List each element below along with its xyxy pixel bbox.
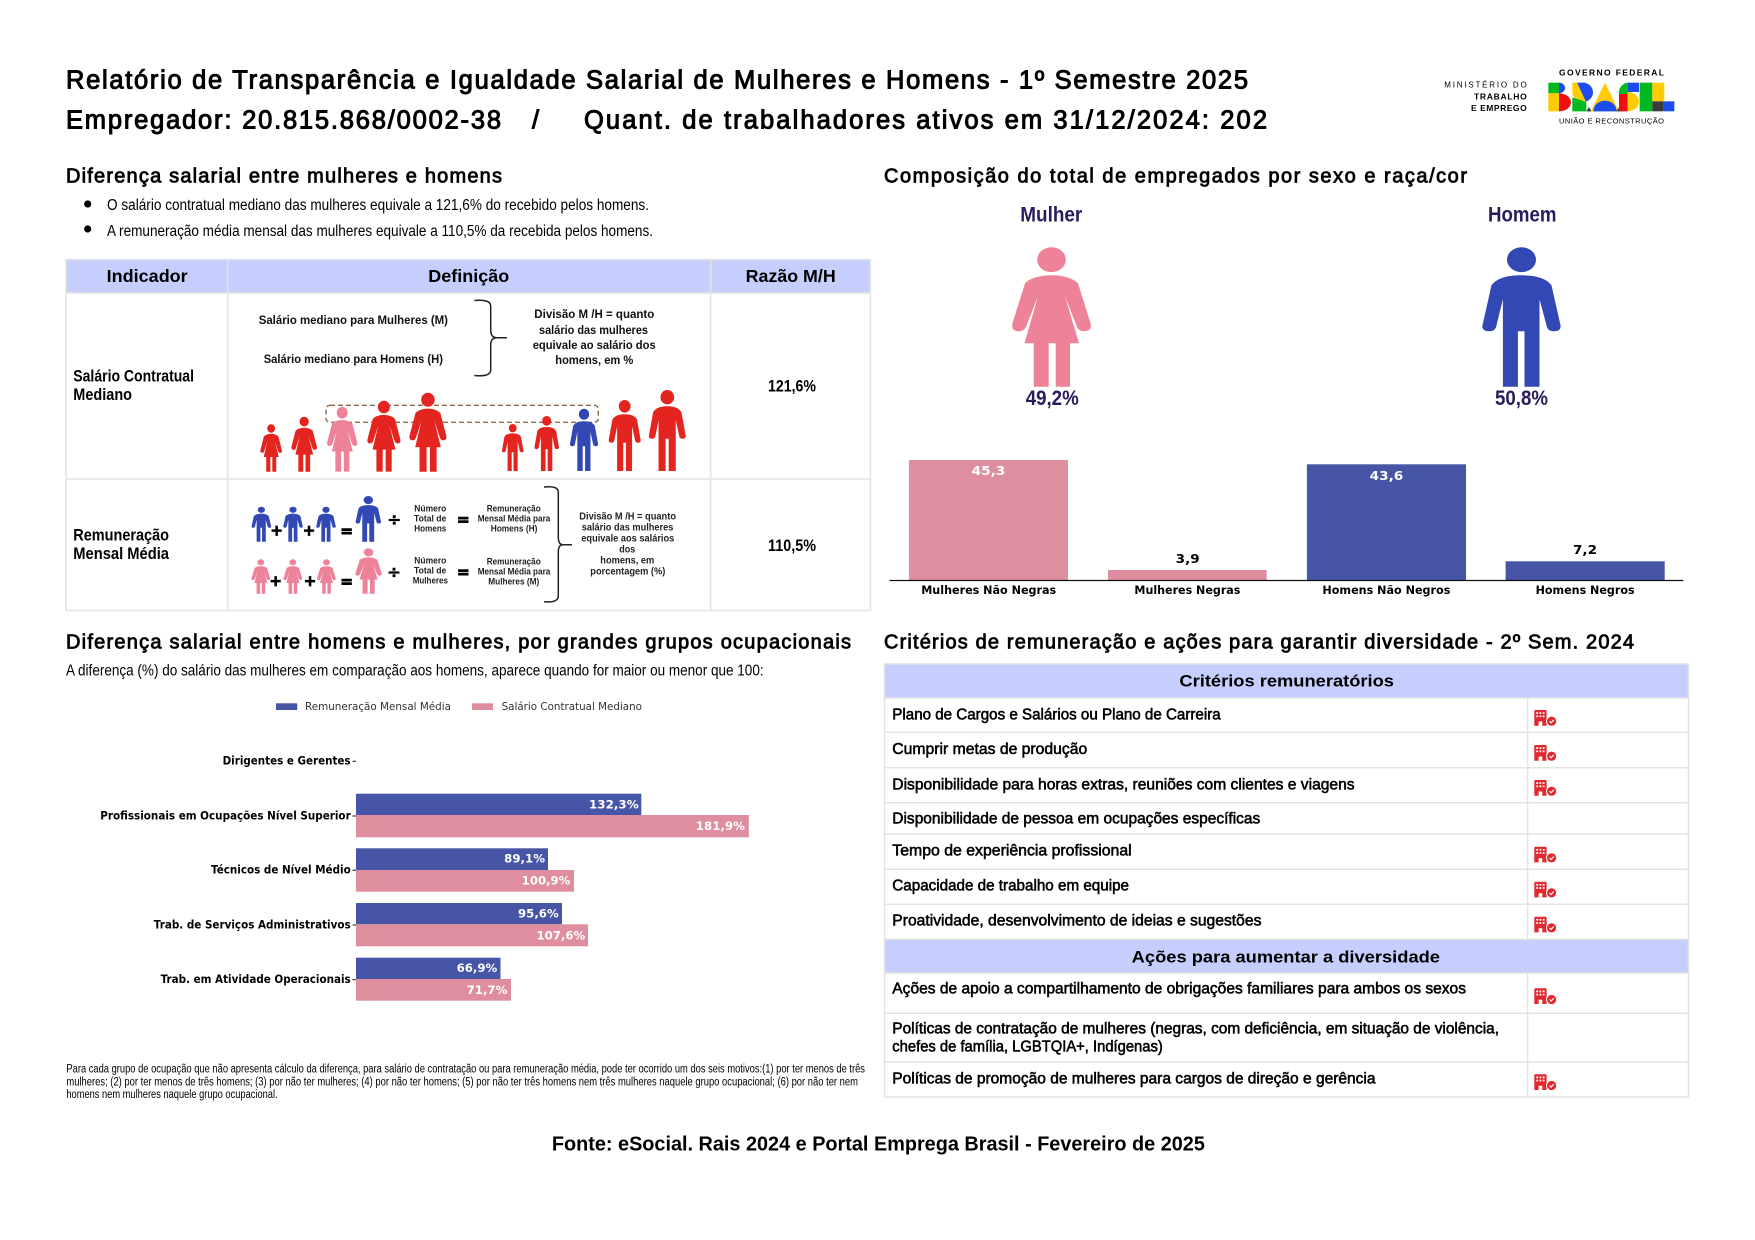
bar chart: grupos ocupacionais: 181,9% (696, 819, 745, 833)
logo: ministério e governo federal: UNIÃO E RECONSTRUÇÃO (1559, 116, 1664, 125)
footnote (66, 1064, 865, 1101)
bar chart: sexo e raça/cor: Mulheres Não Negras (921, 583, 1056, 597)
illustration: fórmula remuneração média: + (304, 572, 316, 590)
illustration: fórmula remuneração média: Mensal Média para (478, 514, 551, 524)
panel: tabela de indicadores (66, 260, 870, 610)
criteria list: Capacidade de trabalho em equipe (892, 877, 1129, 894)
footnote: mulheres; (2) por ter menos de três homens; (3) por não ter mulheres; (4) por não ter homens; (5) por não ter três homens nem três mulheres naquele grupo ocupacional; (6) por não ter nem (66, 1076, 858, 1088)
logo: ministério e governo federal: TRABALHO (1474, 91, 1527, 101)
bar chart: sexo e raça/cor: 43,6 (1370, 468, 1404, 483)
bar chart: sexo e raça/cor: Mulheres Negras (1134, 583, 1241, 597)
bar chart: grupos ocupacionais: Trab. em Atividade Operacionais (161, 972, 351, 986)
illustration: fórmula remuneração média: Mensal Média para (478, 567, 551, 577)
bar chart: grupos ocupacionais: 71,7% (467, 983, 508, 997)
illustration: fórmula remuneração média: Remuneração (487, 557, 541, 567)
table header: Definição (428, 266, 509, 286)
definition: salário mediano: Salário mediano para Homens (H) (264, 352, 443, 366)
bar chart: grupos ocupacionais: 132,3% (589, 797, 639, 811)
definition: salário mediano: Salário mediano para Mulheres (M) (259, 313, 448, 327)
bullet list: O salário contratual mediano das mulheres equivale a 121,6% do recebido pelos homens. (107, 197, 649, 214)
bar chart: grupos ocupacionais: 66,9% (457, 961, 498, 975)
criteria list: Disponibilidade para horas extras, reuniões com clientes e viagens (892, 776, 1355, 793)
criteria list: Proatividade, desenvolvimento de ideias e sugestões (892, 912, 1262, 929)
title: / (532, 106, 540, 134)
header: critérios remuneratórios: Critérios remuneratórios (1179, 672, 1394, 691)
value: 110,5%: 110,5% (768, 537, 816, 555)
illustration: fórmula remuneração média: Total de (414, 514, 446, 524)
panel: homem: 50,8% (1495, 387, 1548, 410)
illustration: fórmula remuneração média: + (270, 522, 283, 540)
bar chart: sexo e raça/cor (890, 460, 1683, 597)
criteria list: Disponibilidade de pessoa em ocupações específicas (892, 810, 1261, 827)
illustration: fórmula remuneração média: + (303, 522, 315, 540)
bar chart: sexo e raça/cor: 7,2 (1573, 542, 1597, 557)
illustration: pessoas ordenadas por salário (260, 390, 686, 472)
value: 121,6%: 121,6% (768, 378, 816, 396)
bar chart: sexo e raça/cor: Homens Não Negros (1322, 583, 1451, 597)
criteria list (892, 706, 1355, 929)
heading: composição: Composição do total de empregados por sexo e raça/cor (884, 166, 1467, 188)
bar chart: sexo e raça/cor: 3,9 (1176, 551, 1200, 566)
title (66, 66, 1267, 134)
actions list: chefes de família, LGBTQIA+, Indígenas) (892, 1039, 1163, 1056)
row label: salário contratual mediano: Salário Contratual (73, 368, 194, 386)
panel: tabela de critérios (884, 664, 1688, 1097)
actions list: Políticas de contratação de mulheres (negras, com deficiência, em situação de violência, (892, 1020, 1499, 1037)
bar chart: sexo e raça/cor: 45,3 (972, 463, 1005, 478)
title: Empregador: 20.815.868/0002-38 (66, 106, 501, 134)
panel: mulher (1012, 204, 1091, 410)
legend: Remuneração Mensal Média (305, 701, 451, 713)
illustration: fórmula remuneração média: Mulheres (M) (488, 577, 539, 587)
bar chart: grupos ocupacionais: Trab. de Serviços Administrativos (154, 917, 351, 931)
actions list: Políticas de promoção de mulheres para cargos de direção e gerência (892, 1070, 1376, 1087)
illustration: fórmula remuneração média: + (269, 572, 282, 590)
actions list (892, 980, 1499, 1087)
illustration: fórmula remuneração média: Divisão M /H = quanto (579, 511, 676, 522)
bar chart: grupos ocupacionais: 100,9% (522, 874, 571, 888)
panel: mulher: 49,2% (1026, 387, 1079, 410)
row label: remuneração mensal média: Remuneração (73, 527, 169, 545)
illustration: fórmula remuneração média: Total de (414, 566, 446, 576)
illustration: fórmula remuneração média: porcentagem (%) (590, 567, 665, 578)
definition: salário mediano: homens, em % (555, 353, 634, 367)
legend: Salário Contratual Mediano (502, 701, 642, 713)
table header (66, 260, 870, 292)
heading: diferença salarial: Diferença salarial entre mulheres e homens (66, 166, 502, 188)
heading: critérios: Critérios de remuneração e ações para garantir diversidade - 2º Sem. 2024 (884, 631, 1634, 653)
bar chart: grupos ocupacionais: Técnicos de Nível Médio (211, 863, 351, 877)
illustration: fórmula remuneração média (251, 487, 676, 602)
illustration: fórmula remuneração média: Número (414, 556, 447, 566)
header: ações para aumentar a diversidade: Ações para aumentar a diversidade (1132, 948, 1440, 967)
logo: ministério e governo federal: E EMPREGO (1471, 103, 1527, 113)
bar chart: grupos ocupacionais (100, 754, 749, 1001)
illustration: fórmula remuneração média: ÷ (387, 510, 401, 530)
illustration: fórmula remuneração média: Remuneração (487, 504, 541, 514)
title: Quant. de trabalhadores ativos em 31/12/2024: 202 (584, 106, 1267, 134)
row label: remuneração mensal média: Mensal Média (73, 545, 170, 563)
panel: homem (1482, 204, 1561, 410)
row label: salário contratual mediano: Mediano (73, 386, 132, 404)
definition: salário mediano: equivale ao salário dos (533, 338, 656, 352)
table header: Indicador (107, 266, 188, 286)
actions list: Ações de apoio a compartilhamento de obrigações familiares para ambos os sexos (892, 980, 1466, 997)
source: Fonte: eSocial. Rais 2024 e Portal Emprega Brasil - Fevereiro de 2025 (552, 1133, 1205, 1156)
illustration: fórmula remuneração média: Homens (H) (491, 524, 537, 534)
definition: salário mediano: salário das mulheres (539, 323, 648, 337)
illustration: fórmula remuneração média: = (340, 573, 353, 591)
logo: ministério e governo federal (1444, 67, 1674, 125)
criteria list: Tempo de experiência profissional (892, 842, 1132, 859)
illustration: fórmula remuneração média: salário das mulheres (582, 523, 674, 534)
bullet list (84, 197, 653, 240)
illustration: fórmula remuneração média: Número (414, 504, 447, 514)
criteria list: Cumprir metas de produção (892, 741, 1087, 758)
legend (276, 701, 642, 713)
bar chart: grupos ocupacionais: Profissionais em Ocupações Nível Superior (100, 808, 351, 822)
illustration: fórmula remuneração média: = (457, 563, 470, 581)
logo: ministério e governo federal: MINISTÉRIO DO (1444, 80, 1527, 89)
illustration: fórmula remuneração média: dos (619, 545, 636, 556)
panel: homem: Homem (1488, 204, 1556, 227)
footnote: homens nem mulheres naquele grupo ocupacional. (66, 1089, 278, 1101)
bar chart: sexo e raça/cor: Homens Negros (1536, 583, 1635, 597)
panel: mulher: Mulher (1020, 204, 1082, 227)
heading: grupos ocupacionais: Diferença salarial entre homens e mulheres, por grandes grupos ocupacionais (66, 631, 851, 653)
criteria list: Plano de Cargos e Salários ou Plano de Carreira (892, 706, 1221, 723)
footnote: Para cada grupo de ocupação que não apresenta cálculo da diferença, para salário de contratação ou para remuneração média, pode ter ocorrido um dos seis motivos:(1) por ter menos de três (66, 1064, 865, 1076)
row label: remuneração mensal média (73, 527, 170, 563)
illustration: fórmula remuneração média: ÷ (387, 562, 401, 582)
table header: Razão M/H (746, 266, 836, 286)
illustration: fórmula remuneração média: homens, em (600, 556, 654, 567)
bar chart: grupos ocupacionais: Dirigentes e Gerentes (223, 754, 351, 768)
illustration: fórmula remuneração média: equivale aos salários (581, 534, 675, 545)
illustration: fórmula remuneração média: Mulheres (413, 576, 448, 586)
bar chart: grupos ocupacionais: 95,6% (518, 906, 559, 920)
title: Relatório de Transparência e Igualdade Salarial de Mulheres e Homens - 1º Semestre 2025 (66, 66, 1248, 94)
subtitle: A diferença (%) do salário das mulheres em comparação aos homens, aparece quando for maior ou menor que 100: (66, 663, 764, 680)
icons: critérios adotados (1534, 710, 1557, 934)
logo: ministério e governo federal: GOVERNO FEDERAL (1559, 67, 1664, 77)
bar chart: grupos ocupacionais: 107,6% (536, 928, 586, 942)
bar chart: grupos ocupacionais: 89,1% (504, 852, 545, 866)
bullet list: A remuneração média mensal das mulheres equivale a 110,5% da recebida pelos homens. (107, 223, 653, 240)
row label: salário contratual mediano (73, 368, 194, 404)
definition: salário mediano: Divisão M /H = quanto (534, 307, 654, 321)
illustration: fórmula remuneração média: = (457, 511, 470, 529)
illustration: fórmula remuneração média: Homens (414, 524, 446, 534)
illustration: fórmula remuneração média: = (340, 522, 353, 540)
definition: salário mediano (259, 300, 656, 376)
icons: ações adotadas (1534, 988, 1557, 1091)
